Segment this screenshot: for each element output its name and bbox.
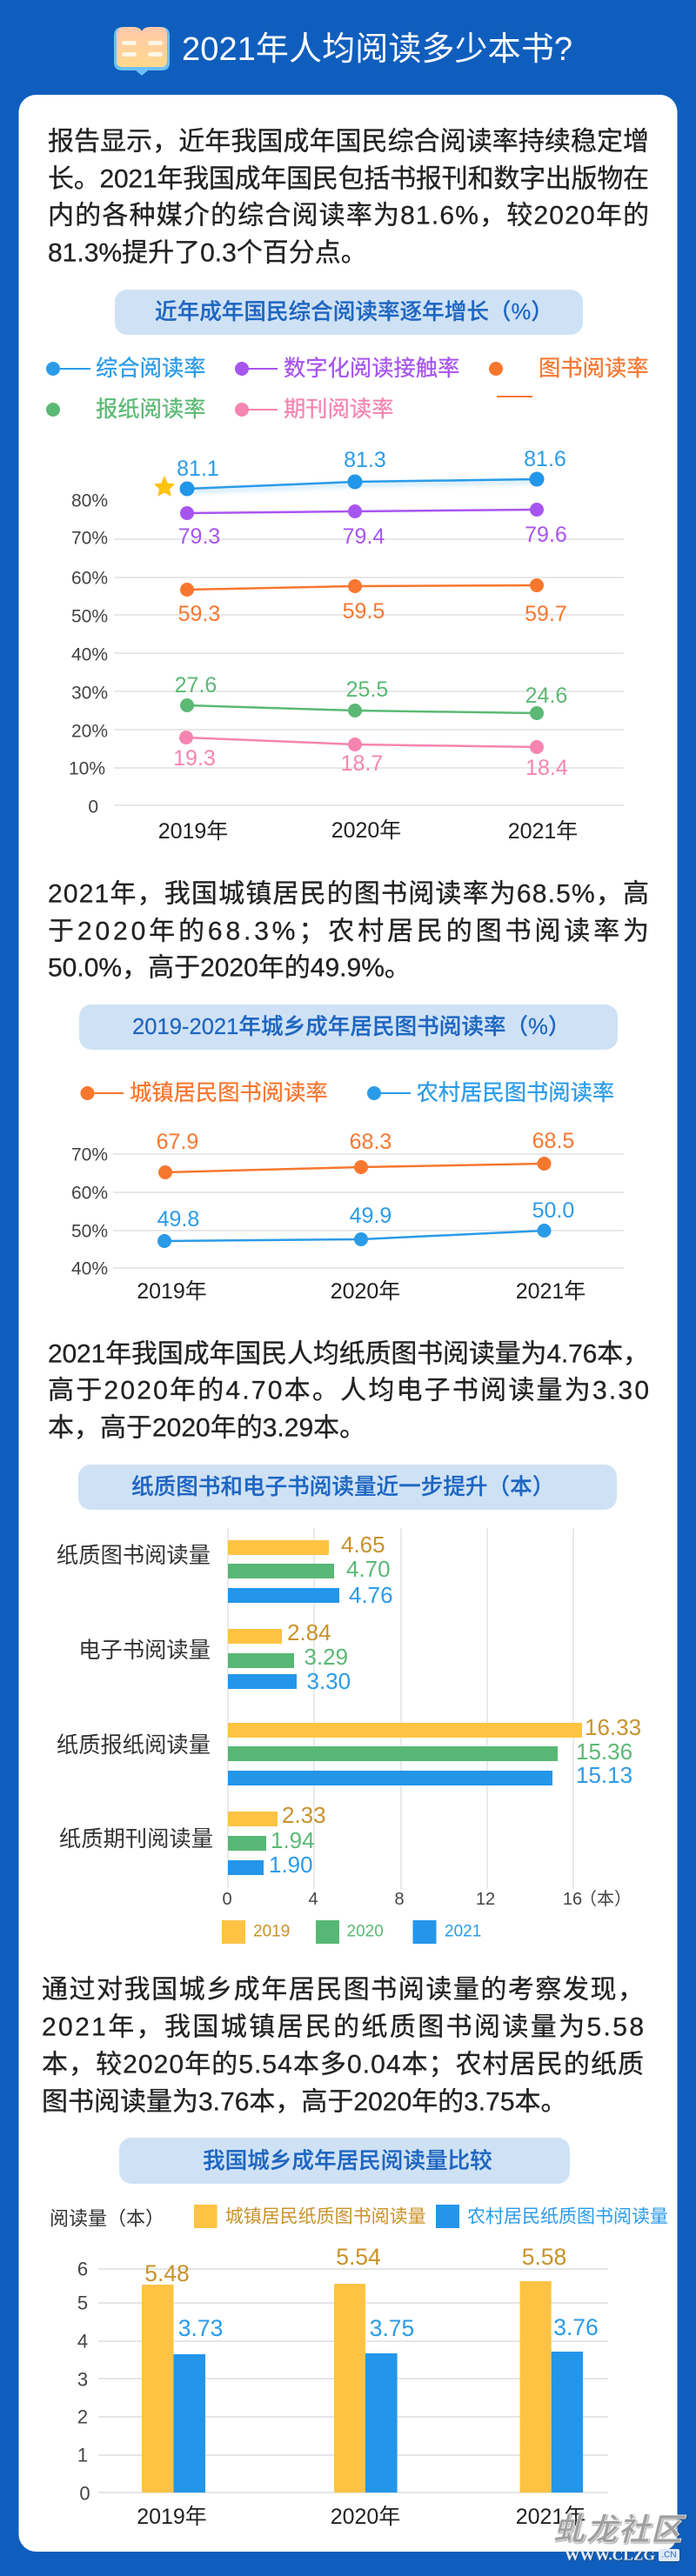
y axis labels: 40% <box>71 645 108 664</box>
text block: urban and rural paragraph: 50.0%，高于2020年的49.9%。 <box>48 953 411 983</box>
value labels: 4.76 <box>349 1582 393 1608</box>
y axis labels: 0 <box>79 2482 90 2505</box>
heading: chart 4 title pill: 我国城乡成年居民阅读量比较 <box>203 2148 492 2173</box>
legend: years <box>222 1920 481 1944</box>
series: urban: 68.3 <box>350 1130 392 1154</box>
x axis years <box>158 818 578 844</box>
series: periodical reading: 19.3 <box>173 746 216 771</box>
series: overall reading rate: 81.1 <box>177 457 219 481</box>
value labels: 1.90 <box>269 1852 313 1878</box>
series: periodical reading: 18.7 <box>341 751 383 776</box>
x axis labels: 12 <box>476 1890 495 1909</box>
value labels: 4.65 <box>341 1532 385 1558</box>
x axis years: 2019年 <box>137 1279 207 1304</box>
legend item: newspaper reading: 报纸阅读率 <box>96 397 205 422</box>
y axis labels <box>71 1145 108 1278</box>
legend: years: 2020 <box>346 1922 384 1941</box>
line chart: urban and rural book reading rates <box>71 1129 624 1304</box>
bar chart: urban and rural reading volume <box>77 2244 608 2529</box>
value labels <box>144 2244 599 2341</box>
text block: intro paragraph <box>48 127 649 268</box>
text block: intro paragraph: 内的各种媒介的综合阅读率为81.6%，较2020年的 <box>48 202 649 230</box>
y axis labels: 80% <box>71 491 108 511</box>
icon: star <box>154 476 175 497</box>
text block: intro paragraph: 报告显示，近年我国成年国民综合阅读率持续稳定增 <box>48 127 649 157</box>
value labels: 5.54 <box>336 2244 381 2270</box>
legend item: periodical reading: 期刊阅读率 <box>284 397 393 422</box>
bars: 2021 <box>228 1588 552 1875</box>
value labels: 2.33 <box>282 1802 326 1828</box>
x axis years: 2019年 <box>137 2505 207 2529</box>
legend item: digital reading: 数字化阅读接触率 <box>284 357 459 381</box>
y axis labels: 50% <box>71 607 108 626</box>
bar chart: reading volume by media <box>57 1528 641 1944</box>
legend item: rural: 农村居民纸质图书阅读量 <box>467 2207 668 2226</box>
series: book reading: 59.5 <box>343 599 385 624</box>
series: rural <box>157 1198 574 1248</box>
value labels: 5.48 <box>144 2260 190 2286</box>
value labels: 5.58 <box>522 2244 566 2270</box>
category labels <box>57 1544 213 1852</box>
watermark: 虬龙社区 <box>553 2505 686 2550</box>
x axis years: 2020年 <box>331 1279 400 1304</box>
y axis labels: 50% <box>71 1221 108 1242</box>
text block: urban and rural volume paragraph: 图书阅读量为3.76本，高于2020年的3.75本。 <box>42 2087 567 2117</box>
series: rural: 49.8 <box>157 1207 199 1231</box>
text block: urban and rural paragraph <box>48 880 649 983</box>
series: newspaper reading <box>175 673 567 720</box>
y axis labels: 0 <box>88 797 98 818</box>
text block: intro paragraph: 81.3%提升了0.3个百分点。 <box>48 238 367 268</box>
category labels: 电子书阅读量 <box>78 1638 211 1663</box>
x axis years: 2020年 <box>331 818 401 843</box>
legend: years: 2019 <box>253 1922 290 1941</box>
y axis labels: 20% <box>71 722 108 741</box>
y axis labels: 3 <box>77 2369 88 2390</box>
legend: years: 2021 <box>445 1922 481 1941</box>
y axis labels: 70% <box>71 1145 108 1165</box>
legend item: urban: 城镇居民图书阅读率 <box>130 1081 328 1105</box>
text block: urban and rural volume paragraph <box>42 1976 644 2117</box>
text block: urban and rural paragraph: 2021年，我国城镇居民的图书阅读率为68.5%，高 <box>48 880 649 908</box>
x axis years <box>137 1279 586 1304</box>
bars: 2020 <box>228 1564 558 1851</box>
y axis labels: 5 <box>77 2292 88 2313</box>
legend item: newspaper reading <box>46 397 205 422</box>
value labels: 2.84 <box>287 1619 331 1645</box>
text block: urban and rural paragraph: 于2020年的68.3%；农村居民的图书阅读率为 <box>48 917 649 946</box>
legend: chart 2 <box>80 1081 614 1105</box>
x axis years: 2020年 <box>331 2505 400 2529</box>
bars: 2019 <box>228 1540 582 1826</box>
x axis labels: 0 <box>222 1890 232 1909</box>
bars: urban <box>142 2281 552 2493</box>
value labels: 3.29 <box>304 1644 348 1670</box>
watermark: WWW.CLZG <box>565 2546 655 2564</box>
series: overall reading rate <box>177 447 566 496</box>
legend item: overall reading rate <box>46 357 205 381</box>
heading: chart 1 title pill: 近年成年国民综合阅读率逐年增长（%） <box>155 299 553 324</box>
value labels: 4.70 <box>346 1556 391 1582</box>
heading: chart 4 title pill <box>119 2138 570 2184</box>
y axis labels <box>77 2258 90 2505</box>
value labels: 15.36 <box>576 1738 632 1765</box>
series: digital reading <box>178 503 567 549</box>
y axis labels: 40% <box>71 1259 108 1278</box>
y axis labels: 10% <box>69 758 105 779</box>
series: rural: 50.0 <box>532 1198 574 1223</box>
value labels: 15.13 <box>576 1762 632 1788</box>
value labels: 3.76 <box>553 2314 599 2340</box>
legend item: periodical reading <box>235 397 393 422</box>
text block: per capita paragraph: 高于2020年的4.70本。人均电子书阅读量为3.30 <box>48 1376 649 1405</box>
line chart: comprehensive reading rates <box>69 447 624 844</box>
value labels <box>269 1532 641 1878</box>
series: periodical reading: 18.4 <box>525 756 568 780</box>
series: newspaper reading: 27.6 <box>175 673 217 697</box>
value labels: 1.94 <box>271 1827 315 1853</box>
series: digital reading: 79.4 <box>343 524 385 549</box>
legend item: overall reading rate: 综合阅读率 <box>96 357 205 381</box>
y axis labels <box>69 491 108 818</box>
value labels: 3.30 <box>306 1668 351 1694</box>
x axis years <box>137 2505 586 2529</box>
y axis labels: 6 <box>77 2258 88 2280</box>
series: overall reading rate: 81.6 <box>524 447 566 471</box>
text block: per capita paragraph <box>48 1339 649 1442</box>
x axis labels: 8 <box>394 1890 405 1909</box>
series: urban: 67.9 <box>157 1130 198 1154</box>
series: digital reading: 79.6 <box>525 523 567 547</box>
category labels: 纸质图书阅读量 <box>57 1544 211 1568</box>
value labels: 16.33 <box>585 1714 641 1740</box>
title: 2021年人均阅读多少本书? <box>182 31 572 68</box>
x axis years: 2021年 <box>516 2505 586 2529</box>
y axis labels: 60% <box>71 1183 108 1204</box>
series: overall reading rate: 81.3 <box>344 448 386 472</box>
x axis years: 2021年 <box>508 819 578 844</box>
value labels: 3.73 <box>178 2315 223 2341</box>
y axis labels: 4 <box>77 2331 88 2352</box>
series: newspaper reading: 24.6 <box>525 684 567 708</box>
series: digital reading: 79.3 <box>178 524 220 549</box>
x axis labels: 16 <box>563 1890 582 1909</box>
heading: chart 2 title pill <box>79 1004 618 1050</box>
category labels: 纸质期刊阅读量 <box>59 1827 213 1852</box>
series: book reading: 59.3 <box>178 602 220 626</box>
series: periodical reading <box>173 731 568 780</box>
heading: chart 3 title pill: 纸质图书和电子书阅读量近一步提升（本） <box>131 1474 554 1499</box>
series: book reading: 59.7 <box>525 602 567 626</box>
x axis years: 2021年 <box>516 1279 586 1304</box>
value labels: 3.75 <box>370 2315 414 2341</box>
x axis labels: （本） <box>579 1889 632 1909</box>
text block: per capita paragraph: 本，高于2020年的3.29本。 <box>48 1414 365 1442</box>
series: urban: 68.5 <box>532 1129 574 1153</box>
legend: chart 4 <box>50 2205 668 2230</box>
series: newspaper reading: 25.5 <box>346 677 388 702</box>
heading: chart 1 title pill <box>115 290 583 335</box>
axis unit: 阅读量（本） <box>50 2207 164 2230</box>
legend item: rural: 农村居民图书阅读率 <box>416 1081 614 1105</box>
heading: chart 2 title pill: 2019-2021年城乡成年居民图书阅读率（%） <box>132 1014 570 1039</box>
heading: chart 3 title pill <box>78 1465 617 1510</box>
series: book reading <box>178 578 567 626</box>
y axis labels: 30% <box>71 684 108 703</box>
text block: per capita paragraph: 2021年我国成年国民人均纸质图书阅读量为4.76本， <box>48 1339 649 1369</box>
series: rural: 49.9 <box>350 1204 392 1228</box>
legend item: book reading: 图书阅读率 <box>539 357 649 381</box>
text block: urban and rural volume paragraph: 2021年，我国城镇居民的纸质图书阅读量为5.58 <box>42 2012 644 2042</box>
bars: rural <box>174 2352 583 2493</box>
x axis labels: 4 <box>308 1890 318 1909</box>
y axis labels: 60% <box>71 569 108 588</box>
x axis labels <box>222 1889 632 1909</box>
text block: intro paragraph: 长。2021年我国成年国民包括书报刊和数字出版物在 <box>48 165 649 193</box>
text block: urban and rural volume paragraph: 本，较2020年的5.54本多0.04本；农村居民的纸质 <box>42 2051 644 2079</box>
icon: open book <box>114 27 170 76</box>
legend item: book reading <box>489 357 649 397</box>
category labels: 纸质报纸阅读量 <box>57 1733 211 1758</box>
legend: chart 1 <box>46 357 649 422</box>
x axis years: 2019年 <box>158 819 228 844</box>
watermark: .CN <box>661 2550 677 2560</box>
text block: urban and rural volume paragraph: 通过对我国城乡成年居民图书阅读量的考察发现， <box>42 1976 644 2004</box>
legend item: urban: 城镇居民纸质图书阅读量 <box>225 2207 426 2226</box>
header <box>114 27 572 76</box>
y axis labels: 1 <box>77 2444 88 2466</box>
y axis labels: 2 <box>77 2406 88 2428</box>
series: urban <box>157 1129 574 1179</box>
y axis labels: 70% <box>71 529 108 548</box>
